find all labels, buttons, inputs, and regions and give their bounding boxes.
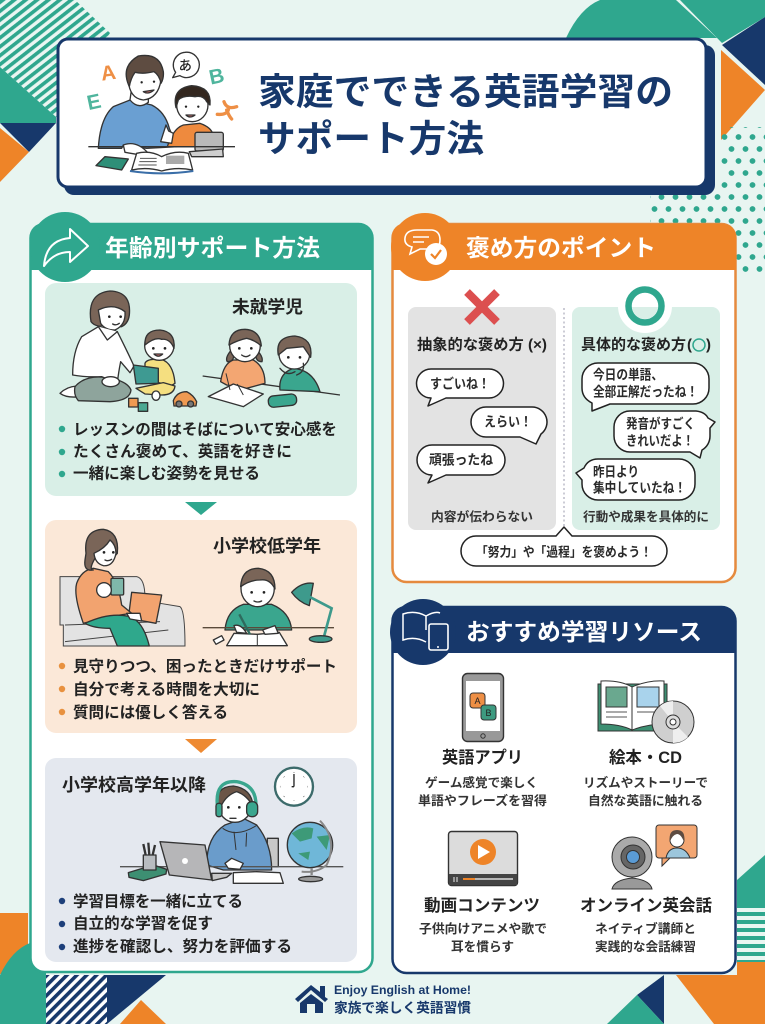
icon: webcam and video call <box>612 825 697 889</box>
illustration: parent and child studying: A <box>99 61 117 86</box>
panel heading: recommended resources <box>390 599 736 665</box>
resource: picture book and CD: 絵本・CD <box>609 748 682 767</box>
panel: how to praise <box>391 213 736 582</box>
age label: upper elementary: 小学校高学年以降 <box>62 775 207 795</box>
card: upper elementary <box>45 758 357 962</box>
list: lower elementary tips: 質問には優しく答える <box>73 702 228 722</box>
bubble: 今日の単語: 今日の単語、 <box>593 366 663 382</box>
bubble: 今日の単語 <box>582 363 709 411</box>
column heading: specific praise: ( <box>687 336 692 354</box>
illustration: parent and child studying: あ <box>179 58 192 73</box>
icon: phone with letter tiles <box>462 674 504 742</box>
bubble: 発音がすごく: きれいだよ！ <box>626 434 694 448</box>
list: upper elementary tips: 進捗を確認し、努力を評価する <box>73 936 292 956</box>
illustration: mother on sofa and child studying <box>60 529 334 646</box>
title <box>258 72 673 160</box>
panel heading: age-based support: 年齢別サポート方法 <box>105 235 321 261</box>
title: サポート方法 <box>258 118 484 160</box>
column heading: specific praise: ) <box>706 336 711 354</box>
icon: house <box>295 985 328 1013</box>
icon: phone with letter tiles: B <box>485 708 492 718</box>
resource: picture book and CD: リズムやストーリーで <box>583 775 708 790</box>
footer text <box>334 983 472 1016</box>
bubble: すごいね: すごいね！ <box>430 376 490 392</box>
list: lower elementary tips: 見守りつつ、困ったときだけサポート <box>73 658 337 676</box>
callout: praise effort and process <box>461 527 667 566</box>
list: upper elementary tips: 学習目標を一緒に立てる <box>73 892 243 910</box>
bubble: 頑張ったね: 頑張ったね <box>429 452 493 468</box>
panel heading: age-based support <box>30 212 373 282</box>
list: preschool tips: たくさん褒めて、英語を好きに <box>73 442 292 460</box>
arrow: preschool to lower grades <box>185 502 217 515</box>
resource: video content: 耳を慣らす <box>451 939 514 954</box>
resource: English app: 英語アプリ <box>442 747 523 767</box>
illustration: mother and children reading <box>60 291 340 411</box>
resource: English app <box>418 674 547 808</box>
resource: video content: 子供向けアニメや歌で <box>419 921 547 936</box>
panel heading: how to praise <box>391 213 736 281</box>
callout: praise effort and process: 「努力」や「過程」を褒めよう！ <box>476 544 652 560</box>
resource: picture book and CD: 自然な英語に触れる <box>588 793 703 808</box>
list: upper elementary tips: 自立的な学習を促す <box>73 914 213 932</box>
resource: video content <box>419 832 547 954</box>
illustration: child with laptop, clock and globe <box>120 768 343 883</box>
resource: online English conversation: ネイティブ講師と <box>595 921 696 936</box>
bubble: 昨日より: 昨日より <box>593 464 639 480</box>
title: 家庭でできる英語学習の <box>258 72 673 112</box>
list: preschool tips <box>59 420 337 482</box>
icon: phone with letter tiles: A <box>474 696 481 706</box>
bubble: 発音がすごく <box>614 411 715 458</box>
resource: English app: ゲーム感覚で楽しく <box>425 775 538 790</box>
bubble: すごいね <box>416 369 503 406</box>
bubble: 昨日より: 集中していたね！ <box>593 480 686 496</box>
resource: video content: 動画コンテンツ <box>424 896 540 915</box>
panel heading: recommended resources: おすすめ学習リソース <box>466 619 702 645</box>
icon: video player <box>448 832 518 886</box>
divider <box>563 308 565 530</box>
panel: age-based support <box>30 212 373 972</box>
bubble: えらい: えらい！ <box>484 414 532 430</box>
icon: book and disc <box>598 681 694 743</box>
resource: picture book and CD <box>583 681 708 808</box>
footer text: 家族で楽しく英語習慣 <box>334 1000 472 1016</box>
list: preschool tips: 一緒に楽しむ姿勢を見せる <box>73 464 260 482</box>
card: preschool <box>45 283 357 496</box>
age label: preschool: 未就学児 <box>232 297 303 317</box>
illustration: parent and child studying: B <box>207 64 226 89</box>
arrow: lower grades to upper grades <box>185 739 217 753</box>
illustration: parent and child studying: E <box>85 90 103 115</box>
note: specific praise: 行動や成果を具体的に <box>583 509 709 524</box>
panel heading: how to praise: 褒め方のポイント <box>466 235 656 261</box>
column: specific praise <box>572 286 720 530</box>
note: abstract praise: 内容が伝わらない <box>431 509 533 524</box>
age label: lower elementary: 小学校低学年 <box>213 536 321 556</box>
resource: online English conversation <box>580 825 712 954</box>
resource: online English conversation: オンライン英会話 <box>580 895 712 915</box>
bubble: 昨日より <box>576 459 695 500</box>
column heading: abstract praise: 抽象的な褒め方 (×) <box>417 336 547 354</box>
list: preschool tips: レッスンの間はそばについて安心感を <box>73 420 337 438</box>
icon: cross <box>467 292 497 322</box>
bubble: 今日の単語: 全部正解だったね！ <box>593 384 698 400</box>
header card <box>58 39 715 195</box>
panel: recommended resources <box>390 599 736 973</box>
column: abstract praise <box>408 292 556 530</box>
list: upper elementary tips <box>59 892 292 956</box>
card: lower elementary <box>45 520 357 733</box>
column heading: specific praise: 具体的な褒め方 <box>581 336 686 354</box>
footer text: Enjoy English at Home! <box>334 983 471 997</box>
resource: English app: 単語やフレーズを習得 <box>418 793 547 808</box>
bubble: 発音がすごく: 発音がすごく <box>626 416 695 432</box>
footer brand <box>295 983 472 1016</box>
illustration: parent and child studying <box>85 52 237 173</box>
bubble: えらい <box>471 407 547 444</box>
resource: online English conversation: 実践的な会話練習 <box>595 939 696 954</box>
bubble: 頑張ったね <box>417 445 505 483</box>
list: lower elementary tips <box>59 658 337 722</box>
icon: circle <box>625 286 665 326</box>
list: lower elementary tips: 自分で考える時間を大切に <box>73 680 260 698</box>
